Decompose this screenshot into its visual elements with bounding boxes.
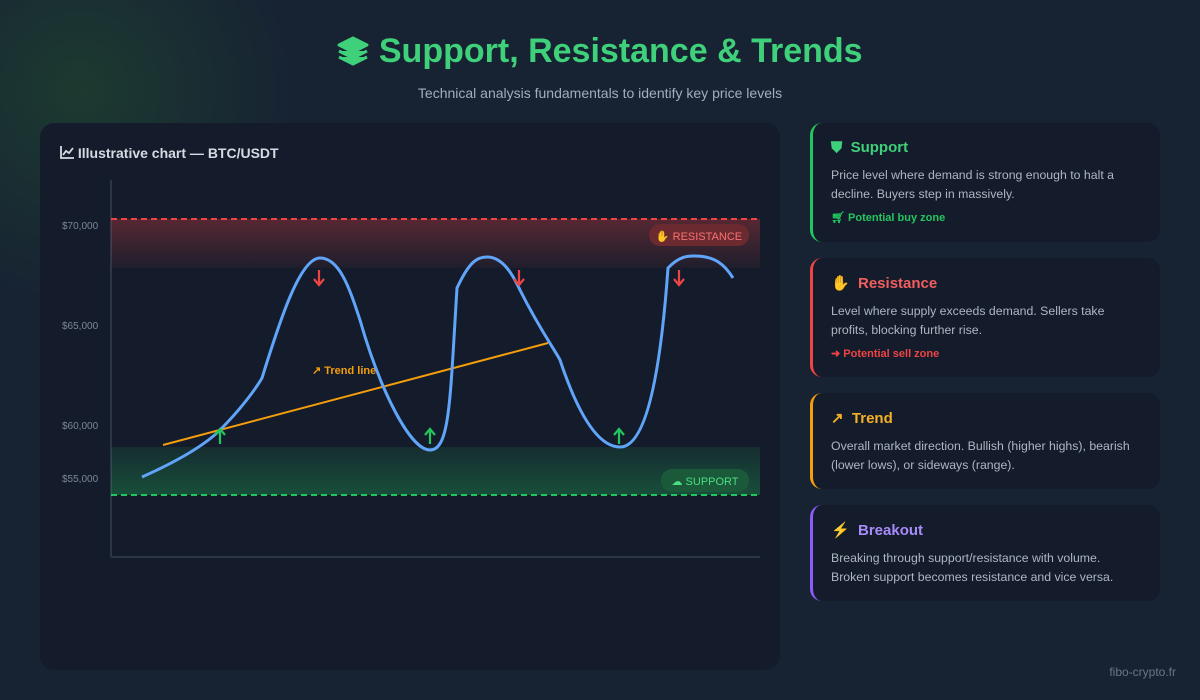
card: resistance: ✋ Resistance <box>831 275 937 292</box>
card: support <box>810 123 1160 242</box>
y-axis labels: $60,000 <box>62 421 99 432</box>
card: support: ⛊ Support <box>831 139 908 156</box>
card: trend: Overall market direction. Bullish (higher highs), bearish (lower lows), or sideways (range). <box>831 439 1130 472</box>
trend line: ↗ Trend line <box>312 365 376 377</box>
y-axis labels: $70,000 <box>62 221 99 232</box>
panel: chart <box>40 123 780 670</box>
support zone: ☁ SUPPORT <box>671 476 739 488</box>
card: trend: ↗ Trend <box>831 410 893 427</box>
subtitle: Technical analysis fundamentals to identify key price levels <box>418 85 782 101</box>
card: support: 🛒︎ Potential buy zone <box>831 212 945 224</box>
card: breakout <box>810 505 1160 601</box>
y-axis labels: $55,000 <box>62 474 99 485</box>
support zone <box>111 447 760 495</box>
chart heading: Illustrative chart — BTC/USDT <box>78 145 279 161</box>
resistance zone <box>111 219 760 268</box>
card: trend <box>810 393 1160 489</box>
card: breakout: Breaking through support/resistance with volume. Broken support becomes resistance and vice versa. <box>831 551 1113 584</box>
footer: fibo-crypto.fr <box>1109 665 1176 679</box>
resistance zone: ✋ RESISTANCE <box>656 230 742 243</box>
title: Support, Resistance & Trends <box>379 32 863 70</box>
card: resistance: Level where supply exceeds demand. Sellers take profits, blocking further rise. <box>831 304 1104 337</box>
price curve <box>142 256 733 477</box>
y-axis labels <box>62 221 99 485</box>
card: support: Price level where demand is strong enough to halt a decline. Buyers step in massively. <box>831 168 1114 201</box>
chart <box>62 180 760 558</box>
trend line <box>163 343 548 445</box>
arrows <box>215 270 684 444</box>
card: breakout: ⚡ Breakout <box>831 522 923 539</box>
y-axis labels: $65,000 <box>62 321 99 332</box>
card: resistance: ➜ Potential sell zone <box>831 348 939 360</box>
card: resistance <box>810 258 1160 377</box>
